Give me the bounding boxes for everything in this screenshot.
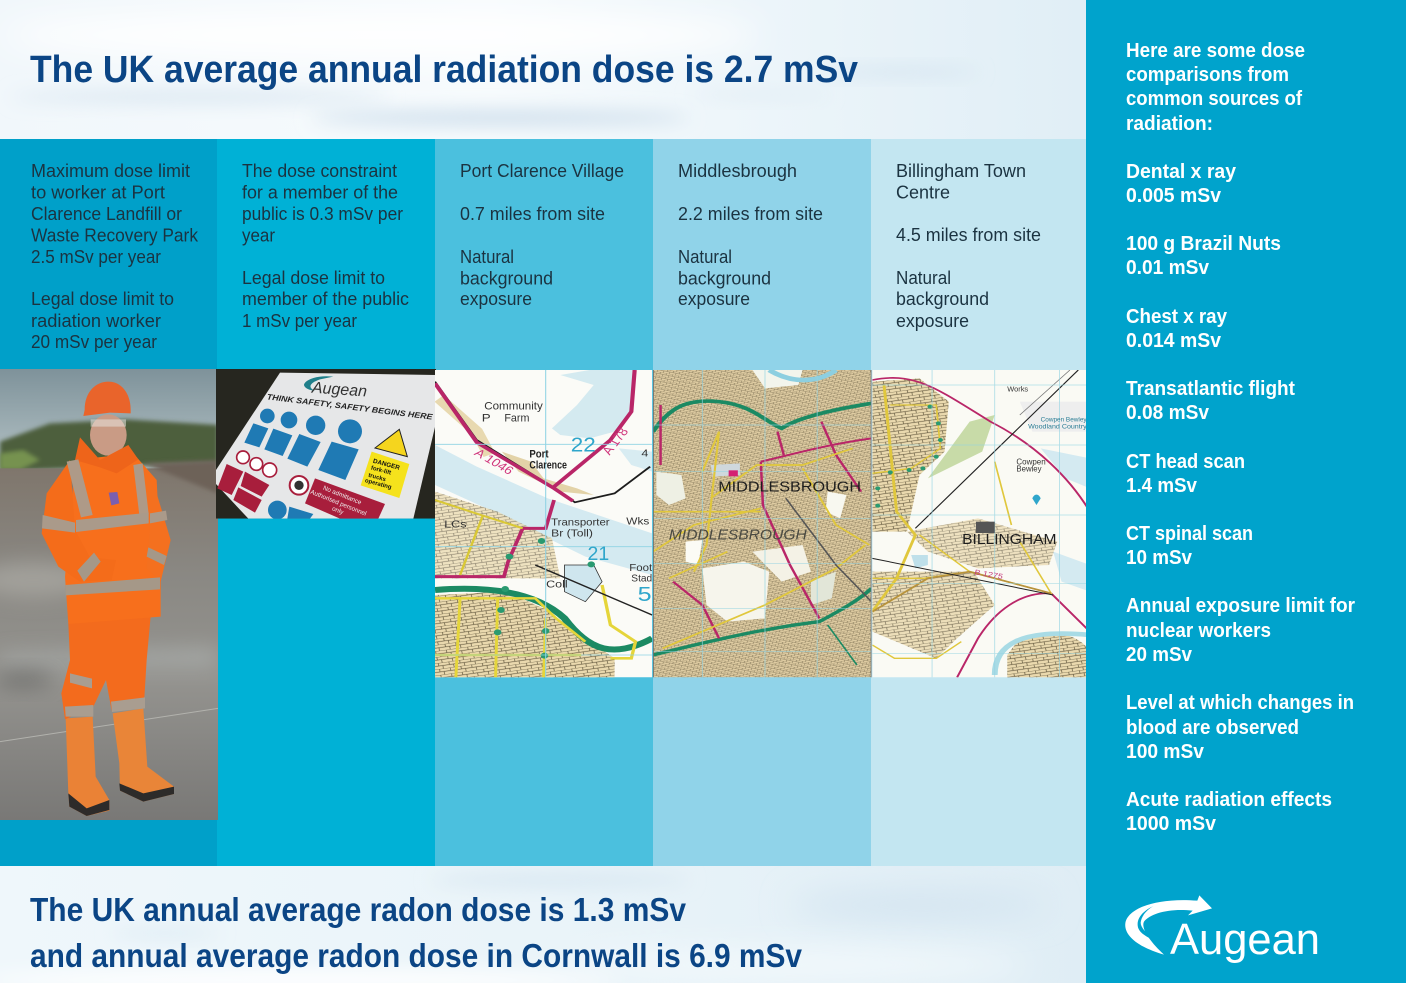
Brazil nuts: 100 g Brazil Nuts: [1126, 233, 1281, 255]
footer statement: radon dose: and annual average radon dose in Cornwall is 6.9 mSv: [30, 937, 803, 974]
text: public dose constraint: public is 0.3 mSv per: [242, 204, 403, 224]
map: Port Clarence: Wks: [626, 516, 650, 527]
text: Middlesbrough: Natural: [678, 247, 732, 267]
text: public dose constraint: [242, 161, 409, 331]
map: Port Clarence: Port: [529, 448, 549, 460]
map: Middlesbrough: [652, 370, 872, 677]
chest x ray: 0.014 mSv: [1126, 330, 1222, 352]
nuclear worker limit: [1126, 595, 1355, 666]
map: Port Clarence: [435, 370, 653, 677]
map: Port Clarence: 5: [638, 582, 652, 605]
dental x ray: 0.005 mSv: [1126, 185, 1222, 207]
map: Port Clarence: Transporter: [551, 518, 610, 528]
logo: Augean: Augean: [1170, 915, 1320, 964]
intro text: radiation:: [1126, 113, 1213, 135]
map: Port Clarence: Stad: [631, 574, 652, 584]
text: worker dose limits: radiation worker: [31, 311, 161, 331]
photo: worker in orange hi-vis clothing: [0, 369, 218, 820]
map: Port Clarence: Farm: [504, 412, 529, 424]
text: public dose constraint: 1 mSv per year: [242, 311, 357, 331]
photo: Augean safety sign board: THINK SAFETY, SAFETY BEGINS HERE: [266, 392, 434, 422]
logo: Augean: [1125, 895, 1320, 964]
CT spinal scan: [1126, 523, 1253, 569]
map: Port Clarence: P: [482, 412, 491, 424]
dental x ray: Dental x ray: [1126, 161, 1237, 183]
column panels: [0, 139, 1086, 866]
panel: dose comparisons: [1086, 0, 1406, 983]
text: Billingham Town Centre: Natural: [896, 268, 951, 288]
CT head scan: [1126, 451, 1245, 497]
map: Middlesbrough: MIDDLESBROUGH: [718, 478, 861, 495]
text: Port Clarence Village: Port Clarence Village: [460, 161, 624, 181]
text: worker dose limits: to worker at Port: [31, 182, 165, 202]
transatlantic flight: [1126, 378, 1295, 424]
map: Billingham: Works: [1007, 385, 1028, 393]
footer statement: radon dose: The UK annual average radon dose is 1.3 mSv: [30, 891, 687, 928]
acute radiation effects: 1000 mSv: [1126, 813, 1217, 835]
text: Middlesbrough: Middlesbrough: [678, 161, 797, 181]
chest x ray: [1126, 306, 1228, 352]
text: public dose constraint: year: [242, 226, 275, 246]
map: Billingham: B 1275: [973, 567, 1005, 581]
text: Billingham Town Centre: background: [896, 289, 989, 309]
intro text: common sources of: [1126, 88, 1302, 110]
map: Billingham: Cowpen Bewley: [1041, 416, 1087, 423]
text: public dose constraint: The dose constraint: [242, 161, 397, 181]
photo: Augean safety sign board: [216, 369, 437, 519]
text: Billingham Town Centre: Billingham Town: [896, 161, 1026, 181]
acute radiation effects: [1126, 789, 1332, 835]
photo: Augean safety sign board: No admittance: [322, 485, 363, 507]
icon: swoosh arrow: [1125, 895, 1212, 955]
Brazil nuts: [1126, 233, 1281, 279]
map: Port Clarence: A 1046: [471, 446, 517, 477]
photo: Augean safety sign board: fork-lift: [370, 465, 392, 477]
map: Port Clarence: 22: [571, 433, 596, 456]
CT spinal scan: CT spinal scan: [1126, 523, 1253, 545]
text: Billingham Town Centre: 4.5 miles from site: [896, 225, 1041, 245]
intro text: [1126, 40, 1305, 135]
text: Port Clarence Village: exposure: [460, 289, 532, 309]
transatlantic flight: 0.08 mSv: [1126, 402, 1210, 424]
map: Billingham: Woodland Country: [1028, 423, 1087, 430]
text: worker dose limits: Waste Recovery Park: [31, 226, 199, 246]
text: worker dose limits: Legal dose limit to: [31, 289, 174, 309]
text: public dose constraint: for a member of the: [242, 182, 398, 202]
map: Port Clarence: Foot: [629, 563, 653, 574]
map: Billingham: Bewley: [1016, 465, 1042, 473]
dental x ray: [1126, 161, 1237, 207]
photo: Augean safety sign board: Augean: [310, 380, 368, 401]
text: Middlesbrough: [678, 161, 823, 309]
map: Port Clarence: Clarence: [529, 459, 567, 471]
CT spinal scan: 10 mSv: [1126, 547, 1193, 569]
transatlantic flight: Transatlantic flight: [1126, 378, 1295, 400]
photo: Augean safety sign board: only: [331, 505, 345, 517]
map: Port Clarence: LCs: [444, 520, 467, 530]
photo: Augean safety sign board: operating: [364, 478, 392, 491]
text: Port Clarence Village: Natural: [460, 247, 514, 267]
map: Port Clarence: Coll: [546, 580, 568, 590]
map: Billingham: Cowpen: [1016, 457, 1046, 466]
blood changes level: 100 mSv: [1126, 741, 1205, 763]
map: Billingham: [872, 370, 1090, 677]
text: Middlesbrough: background: [678, 268, 771, 288]
nuclear worker limit: Annual exposure limit for: [1126, 595, 1355, 617]
text: worker dose limits: [31, 161, 199, 352]
map: Port Clarence: A 178: [598, 425, 632, 457]
nuclear worker limit: nuclear workers: [1126, 620, 1271, 642]
nuclear worker limit: 20 mSv: [1126, 644, 1193, 666]
map: Port Clarence: Br (Toll): [551, 528, 593, 539]
acute radiation effects: Acute radiation effects: [1126, 789, 1332, 811]
CT head scan: CT head scan: [1126, 451, 1245, 473]
photo: Augean safety sign board: DANGER: [372, 458, 401, 472]
blood changes level: blood are observed: [1126, 717, 1299, 739]
background: bottom sky banner: [0, 866, 1086, 983]
text: Billingham Town Centre: [896, 161, 1041, 331]
text: worker dose limits: 20 mSv per year: [31, 332, 157, 352]
map: Port Clarence: 4: [641, 449, 648, 459]
intro text: comparisons from: [1126, 64, 1289, 86]
text: worker dose limits: 2.5 mSv per year: [31, 247, 161, 267]
Brazil nuts: 0.01 mSv: [1126, 257, 1210, 279]
blood changes level: Level at which changes in: [1126, 692, 1354, 714]
text: Middlesbrough: exposure: [678, 289, 750, 309]
background: top sky banner: [0, 0, 1086, 139]
text: Middlesbrough: 2.2 miles from site: [678, 204, 823, 224]
text: Port Clarence Village: 0.7 miles from site: [460, 204, 605, 224]
CT head scan: 1.4 mSv: [1126, 475, 1198, 497]
photo: Augean safety sign board: trucks: [367, 473, 387, 483]
intro text: Here are some dose: [1126, 40, 1305, 62]
map: Middlesbrough: MIDDLESBROUGH: [669, 526, 808, 543]
text: Port Clarence Village: background: [460, 268, 553, 288]
chest x ray: Chest x ray: [1126, 306, 1228, 328]
text: public dose constraint: member of the public: [242, 289, 409, 309]
maps: Port Clarence, Middlesbrough and Billingham: [435, 370, 1090, 677]
map: Port Clarence: Community: [484, 400, 544, 412]
footer statement: radon dose: [30, 891, 803, 974]
text: Port Clarence Village: [460, 161, 624, 309]
text: public dose constraint: Legal dose limit to: [242, 268, 385, 288]
text: Billingham Town Centre: exposure: [896, 311, 969, 331]
text: worker dose limits: Clarence Landfill or: [31, 204, 182, 224]
worker figure: [42, 382, 174, 816]
title: The UK average annual radiation dose is 2.7 mSv: [30, 49, 858, 91]
text: Billingham Town Centre: Centre: [896, 182, 950, 202]
map: Port Clarence: 21: [587, 542, 609, 564]
photo: Augean safety sign board: Authorised personnel: [309, 489, 367, 518]
text: worker dose limits: Maximum dose limit: [31, 161, 190, 181]
blood changes level: [1126, 692, 1354, 763]
map: Billingham: BILLINGHAM: [962, 531, 1057, 548]
